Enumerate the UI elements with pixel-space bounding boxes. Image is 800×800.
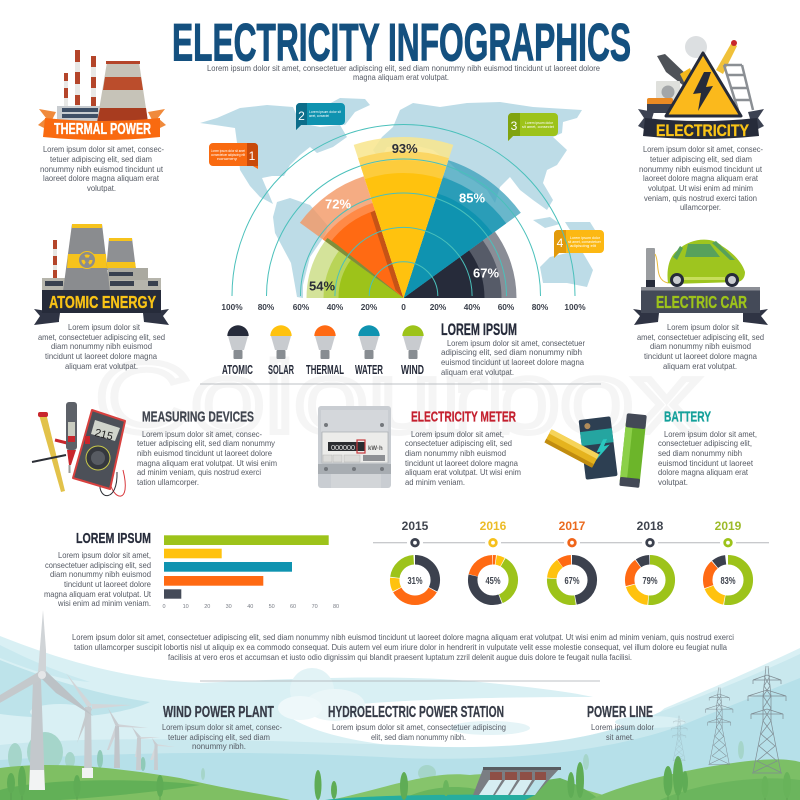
bulb: thermal	[306, 325, 344, 377]
text: atomic energy	[38, 322, 165, 371]
text block: electricity meter: consectetuer adipiscing elit, sed	[405, 438, 512, 448]
donut 2015: 31%	[408, 575, 423, 587]
text: electric car: amet, consectetuer adipiscing elit, sed	[637, 332, 764, 342]
text block: hydroelectric power station	[328, 704, 506, 742]
ribbon: atomic energy	[34, 290, 169, 325]
landscape background	[0, 636, 800, 800]
timeline 2015	[402, 519, 429, 551]
trees	[7, 756, 791, 800]
icon: nuclear plant	[42, 224, 161, 291]
text block: wind power plant	[162, 704, 282, 751]
callout 3: Lorem ipsum dolor	[525, 121, 554, 125]
text block: measuring devices	[137, 409, 277, 487]
timeline 2015: 2015	[402, 519, 429, 533]
timeline	[373, 519, 769, 551]
power pylons	[671, 666, 786, 773]
panel: electricity	[638, 36, 764, 212]
wedge: wind 54%	[306, 238, 404, 298]
text block: measuring devices: ad minim veniam, quis nostrud exerci	[137, 467, 261, 477]
text: electricity: Lorem ipsum dolor sit amet, consec-	[643, 144, 763, 154]
bulb: water: WATER	[355, 363, 383, 377]
donut 2016	[473, 560, 513, 600]
bar chart: 50	[269, 604, 275, 610]
text block: battery: euismod tincidunt ut laoreet	[658, 458, 754, 468]
bar chart: 10	[183, 604, 189, 610]
text block: electricity meter	[405, 409, 521, 487]
axis labels: 20%	[430, 302, 447, 312]
bulb: thermal: THERMAL	[306, 363, 344, 377]
axis labels: 40%	[327, 302, 344, 312]
value labels	[309, 141, 499, 294]
text block: wind power plant: tetuer adipiscing elit, sed diam	[168, 732, 270, 742]
donut 2018	[630, 560, 670, 600]
text block: electricity meter: diam nonummy nibh euismod	[405, 448, 506, 458]
infographic canvas: Colourbox	[95, 342, 700, 454]
value labels: 54%	[309, 278, 335, 294]
value labels: 72%	[325, 196, 351, 212]
donut 2015	[395, 560, 435, 600]
donut 2019: 83%	[720, 575, 736, 587]
text block: power line	[587, 704, 654, 742]
bulb: solar	[268, 325, 294, 377]
bar chart: 80	[333, 604, 339, 610]
wedge: thermal 72%	[300, 176, 404, 298]
timeline 2019: 2019	[715, 519, 742, 533]
text block: bottom paragraph: facilisis at vero eros et accumsan et iusto odio dignissim qui blandit praesent luptatum zzril delenit augue duis dolore te feugait nulla facilisi.	[168, 652, 632, 662]
ribbon: thermal power	[38, 109, 166, 140]
icon: electricity meter	[318, 406, 391, 488]
axis labels: 100%	[564, 302, 586, 312]
panel: atomic energy	[34, 224, 169, 371]
wedge: solar 93%	[354, 137, 453, 298]
text block: battery: Lorem ipsum dolor sit amet,	[664, 429, 757, 439]
ribbon: electricity	[638, 109, 764, 140]
radial chart	[232, 124, 575, 298]
text: electricity: tetuer adipiscing elit, sed diam	[650, 154, 752, 164]
world map	[200, 98, 595, 298]
donut 2019	[708, 560, 748, 600]
icon: warning triangle and tools	[647, 36, 753, 116]
bar chart: 70	[312, 604, 318, 610]
timeline 2018: 2018	[637, 519, 664, 533]
callout 4: 4	[557, 236, 564, 250]
callout 2: 2	[298, 109, 305, 123]
text block: lorem ipsum legend: Lorem ipsum dolor sit amet, consectetuer	[447, 338, 585, 348]
text block: power line: sit amet.	[606, 732, 634, 742]
timeline 2017: 2017	[559, 519, 586, 533]
axis labels: 60%	[498, 302, 515, 312]
bulb: solar: SOLAR	[268, 363, 294, 377]
callout 2: Lorem ipsum dolor sit	[309, 110, 341, 114]
text block: bar chart description: wisi enim ad minim veniam.	[57, 598, 151, 608]
icon: electricity meter: kW·h	[368, 446, 383, 452]
bar chart: 30	[226, 604, 232, 610]
text: thermal power: laoreet dolore magna aliquam erat	[43, 173, 160, 183]
axis labels: 100%	[221, 302, 243, 312]
axis labels	[221, 302, 586, 312]
text block: electricity meter: ELECTRICITY METER	[411, 409, 516, 426]
text: electricity	[639, 144, 763, 212]
icon: measuring devices: 215	[93, 427, 114, 443]
bar chart	[162, 535, 339, 610]
text block: lorem ipsum legend: LOREM IPSUM	[441, 320, 517, 339]
icon: measuring devices	[32, 402, 125, 496]
text: electric car: aliquam erat volutpat.	[663, 361, 737, 371]
text: electric car	[637, 322, 764, 371]
text: atomic energy: tincidunt ut laoreet dolore magna	[45, 351, 157, 361]
axis labels: 60%	[293, 302, 310, 312]
text block: power line: POWER LINE	[587, 704, 653, 721]
timeline 2016: 2016	[480, 519, 507, 533]
bulb: wind	[401, 325, 424, 377]
text block: battery: consectetuer adipiscing elit,	[658, 438, 752, 448]
text block: measuring devices: MEASURING DEVICES	[142, 409, 254, 426]
text block: lorem ipsum legend: aliquam erat volutpat.	[441, 367, 514, 377]
legend bulbs	[222, 325, 424, 377]
text block: electricity meter: ad minim veniam.	[405, 477, 465, 487]
subtitle: magna aliquam erat volutpat.	[353, 72, 449, 82]
text block: bar chart description: consectetuer adipiscing elit, sed	[45, 560, 151, 570]
text block: lorem ipsum legend: adipiscing elit, sed diam nonummy nibh	[441, 347, 582, 357]
text: atomic energy: amet, consectetuer adipiscing elit, sed	[38, 332, 165, 342]
text: thermal power: Lorem ipsum dolor sit amet, consec-	[43, 144, 164, 154]
bar chart: 40	[247, 604, 253, 610]
bulb: wind: WIND	[401, 363, 424, 377]
panel: electric car	[633, 240, 768, 371]
text: electricity: volutpat. Ut wisi enim ad minim	[648, 183, 753, 193]
callout 4: adipiscing elit	[570, 244, 596, 248]
callout 2: amet, consectet	[309, 114, 329, 118]
text block: battery: sed diam nonummy nibh	[658, 448, 742, 458]
text block: bar chart description: tincidunt ut laoreet dolore	[64, 579, 151, 589]
text block: wind power plant: Lorem ipsum dolor sit amet, consec-	[162, 722, 282, 732]
bulb: atomic	[222, 325, 253, 377]
text block: bar chart description: LOREM IPSUM	[76, 530, 151, 547]
axis labels: 20%	[361, 302, 378, 312]
text: electricity: laoreet dolore magna aliquam erat	[643, 173, 759, 183]
axis labels: 40%	[464, 302, 481, 312]
value labels: 85%	[459, 190, 485, 206]
callout 1: consectetuer adipiscing elit	[211, 153, 245, 157]
text: electric car: Lorem ipsum dolor sit	[667, 322, 740, 332]
text block: bar chart description: magna aliquam erat volutpat. Ut	[44, 589, 152, 599]
text: thermal power: volutpat.	[87, 183, 116, 193]
axis labels: 80%	[258, 302, 275, 312]
callout 4	[554, 230, 604, 258]
text block: lorem ipsum legend: euismod tincidunt ut laoreet dolore magna	[441, 357, 584, 367]
callout 4: Lorem ipsum dolor	[570, 236, 601, 240]
value labels: 93%	[392, 141, 418, 156]
ribbon: electricity: ELECTRICITY	[656, 122, 749, 140]
wedge: water 85%	[404, 160, 521, 298]
subtitle: Lorem ipsum dolor sit amet, consectetuer adipiscing elit, sed diam nonummy nibh euismod tincidunt ut laoreet dolore	[207, 63, 600, 73]
callout 3: 3	[511, 119, 518, 133]
text block: hydroelectric power station: elit, sed diam nonummy nibh.	[371, 732, 466, 742]
timeline 2016	[480, 519, 507, 551]
wind turbines	[0, 610, 175, 790]
text block: hydroelectric power station: HYDROELECTRIC POWER STATION	[328, 704, 504, 721]
donut 2017	[552, 560, 592, 600]
text block: electricity meter: aliquam erat volutpat. Ut wisi enim	[405, 467, 521, 477]
green hills and water	[0, 759, 800, 800]
axis labels: 80%	[532, 302, 549, 312]
text block: wind power plant: WIND POWER PLANT	[163, 704, 274, 721]
text: electricity: ullamcorper.	[680, 202, 721, 212]
axis labels: 0	[401, 302, 406, 312]
timeline 2017	[559, 519, 586, 551]
callout 1: nonummy	[217, 157, 237, 161]
callout 3	[508, 113, 558, 141]
text block: bar chart description: diam nonummy nibh euismod	[50, 569, 151, 579]
text: thermal power	[40, 144, 164, 193]
scale arcs	[232, 124, 575, 296]
text block: wind power plant: nonummy nibh.	[192, 741, 246, 751]
bar chart: 0	[162, 604, 166, 610]
bulb: atomic: ATOMIC	[222, 363, 253, 377]
hydroelectric dam	[473, 767, 561, 795]
text: thermal power: nonummy nibh euismod tincidunt ut	[40, 164, 164, 174]
ribbon: thermal power: THERMAL POWER	[54, 121, 151, 138]
value labels: 67%	[473, 266, 499, 280]
text block: bar chart description: Lorem ipsum dolor sit amet,	[58, 550, 151, 560]
icon: charging electric car	[646, 240, 745, 288]
text: electric car: tincidunt ut laoreet dolore magna	[644, 351, 757, 361]
text block: electricity meter: Lorem ipsum dolor sit amet,	[411, 429, 504, 439]
text block: measuring devices: nibh euismod tincidunt ut laoreet dolore	[137, 448, 272, 458]
text block: measuring devices: magna aliquam erat volutpat. Ut wisi enim	[137, 458, 277, 468]
callout 1: Lorem ipsum dolor sit amet	[211, 149, 245, 153]
text: atomic energy: diam nonummy nibh euismod	[51, 341, 152, 351]
text block: battery	[658, 409, 757, 487]
text block: hydroelectric power station: Lorem ipsum dolor sit amet, consectetuer adipiscing	[332, 722, 506, 732]
text block: bottom paragraph: Lorem ipsum dolor sit amet, consectetuer adipiscing elit, sed diam nonummy nibh euismod tincidunt ut laoreet dolore magna aliquam erat volutpat. Ut wisi enim ad minim veniam, quis nostrud exerci	[72, 632, 734, 642]
text block: battery: BATTERY	[664, 409, 711, 426]
wedge: atomic 67%	[404, 232, 516, 298]
text block: bottom paragraph	[72, 632, 734, 662]
callout 1: 1	[249, 149, 256, 163]
callout 2	[296, 103, 345, 130]
icon: electricity meter: 000000	[331, 443, 355, 452]
text block: bottom paragraph: tation ullamcorper suscipit lobortis nisl ut aliquip ex ea commodo consequat. Duis autem vel eum iriure dolor in hendrerit in vulputate velit esse molestie consequat, vel illum dolore eu feugiat nulla	[74, 642, 727, 652]
panel: thermal power	[38, 50, 166, 193]
text: electricity: veniam, quis nostrud exerci tation	[644, 193, 757, 203]
text: electricity: nonummy nibh euismod tincidunt ut	[639, 164, 763, 174]
icon: thermal power plant	[57, 50, 148, 123]
icon: batteries	[544, 413, 647, 488]
text block: electricity meter: tincidunt ut laoreet dolore magna	[405, 458, 518, 468]
text block: bar chart description	[44, 530, 152, 608]
text: thermal power: tetuer adipiscing elit, sed diam	[50, 154, 152, 164]
text block: measuring devices: Lorem ipsum dolor sit amet, consec-	[142, 429, 262, 439]
text: atomic energy: Lorem ipsum dolor sit	[68, 322, 141, 332]
text block: measuring devices: tation ullamcorper.	[137, 477, 199, 487]
subtitle	[207, 63, 600, 82]
text block: battery: dolore magna aliquam erat	[658, 467, 749, 477]
donut 2018: 79%	[642, 575, 658, 587]
text block: measuring devices: tetuer adipiscing elit, sed diam nonummy	[137, 438, 276, 448]
callout 3: sit amet, consectet	[522, 125, 554, 129]
timeline 2019	[715, 519, 742, 551]
text block: lorem ipsum legend	[441, 320, 585, 377]
text: electric car: diam nonummy nibh euismod	[650, 341, 751, 351]
bar chart: 20	[204, 604, 210, 610]
text block: battery: volutpat.	[658, 477, 688, 487]
timeline 2018	[637, 519, 664, 551]
donut 2017: 67%	[564, 575, 580, 587]
text block: power line: Lorem ipsum dolor	[591, 722, 654, 732]
bulb: water	[355, 325, 383, 377]
callout 1	[209, 143, 258, 169]
ribbon: atomic energy: ATOMIC ENERGY	[49, 292, 156, 312]
bar chart: 60	[290, 604, 296, 610]
callout 4: sit amet, consectetuer	[568, 240, 602, 244]
text: atomic energy: aliquam erat volutpat.	[65, 361, 138, 371]
ribbon: electric car: ELECTRIC CAR	[656, 292, 747, 312]
donut 2016: 45%	[486, 575, 501, 587]
